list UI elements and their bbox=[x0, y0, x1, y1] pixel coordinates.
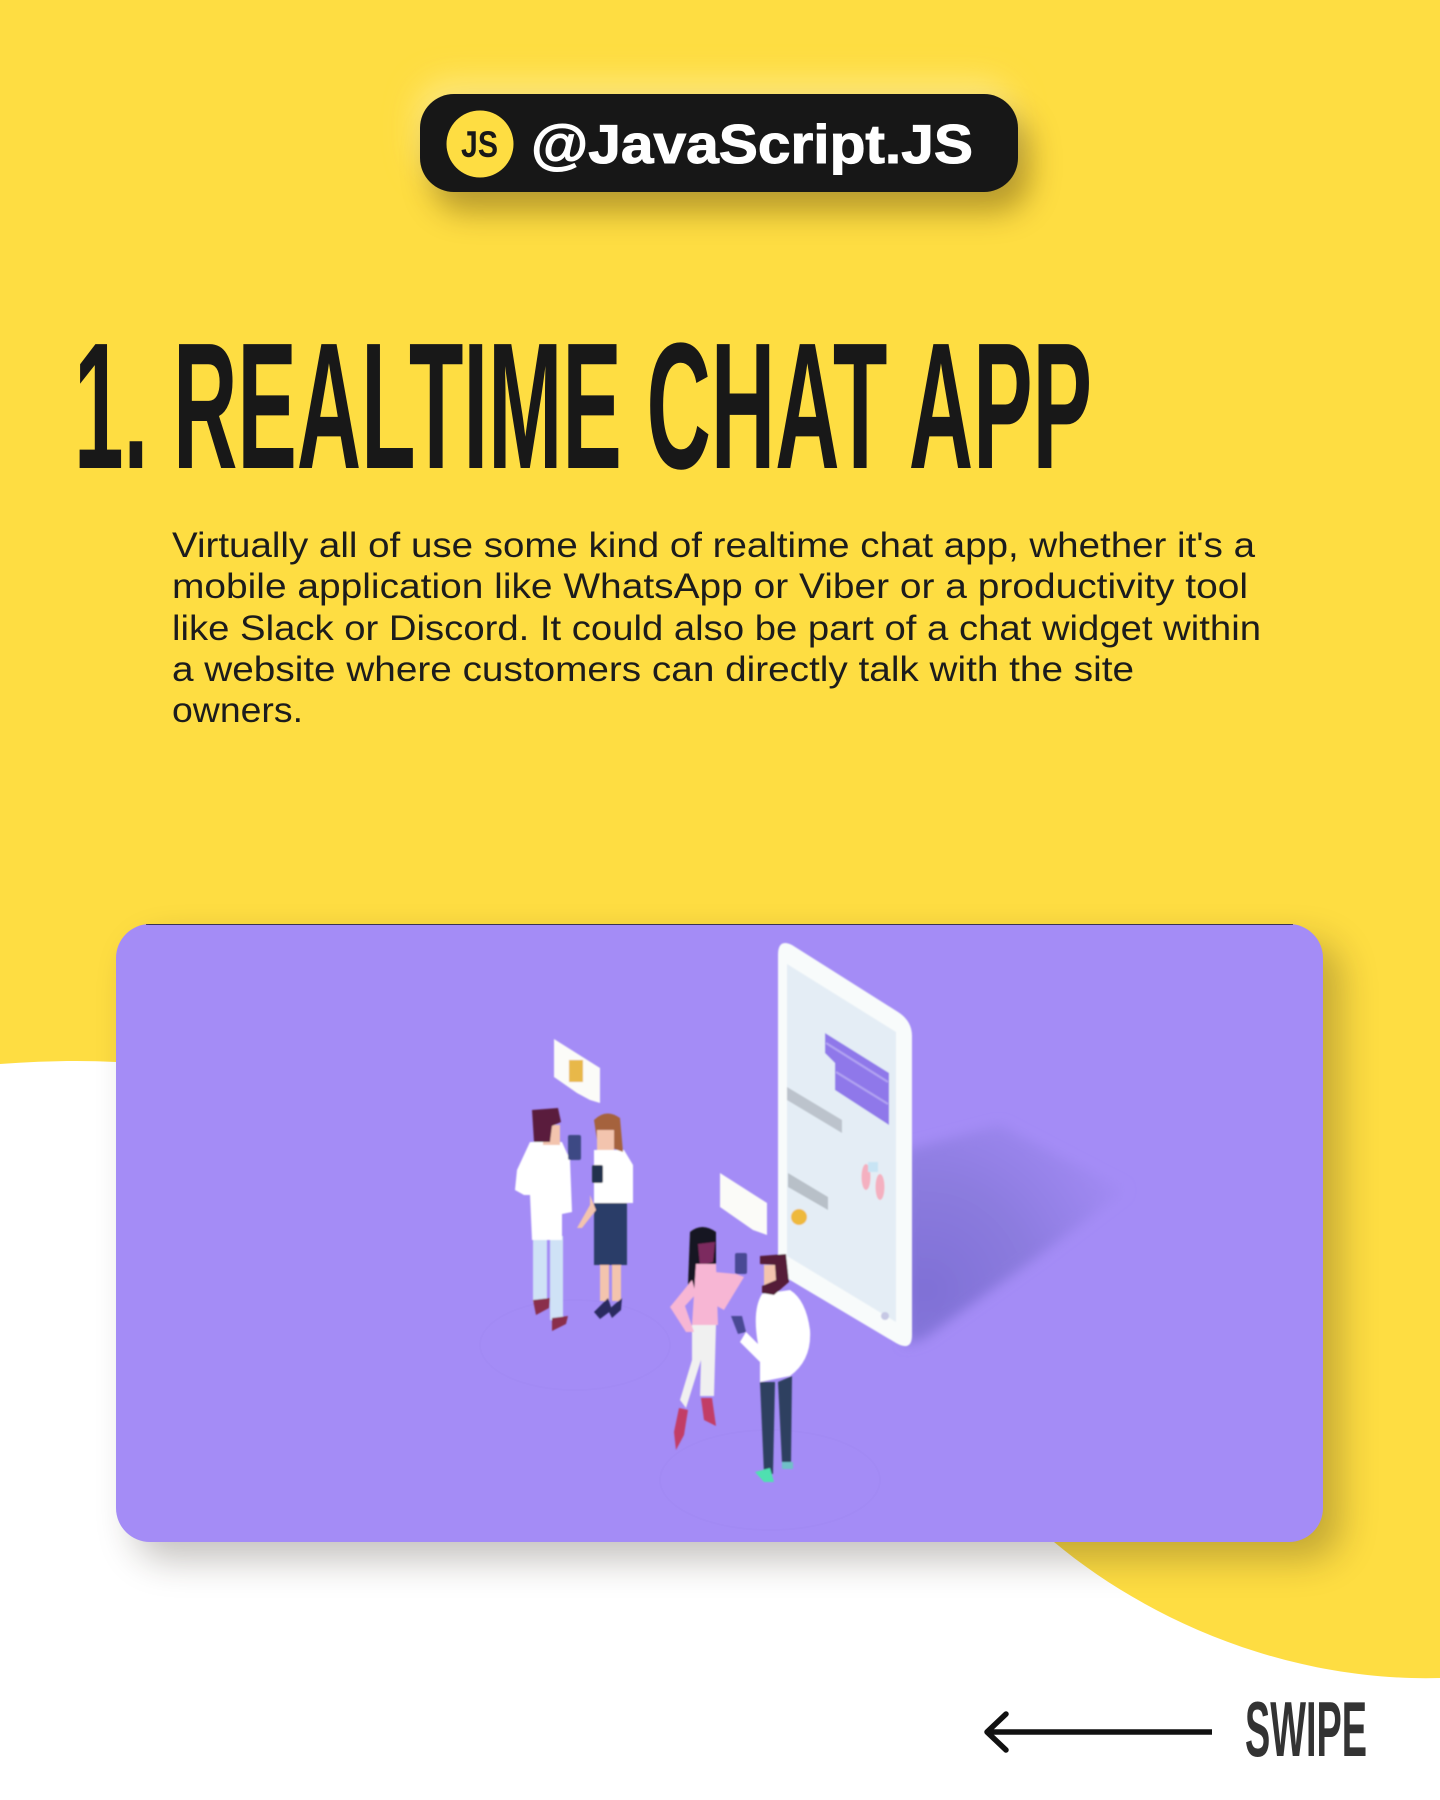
woman 1 bbox=[577, 1113, 633, 1319]
body paragraph: a website where customers can directly talk with the site bbox=[172, 650, 1134, 689]
arrow: swipe left bbox=[987, 1714, 1212, 1750]
man 1 bbox=[515, 1108, 581, 1331]
man 2 bbox=[731, 1254, 810, 1482]
body paragraph: like Slack or Discord. It could also be part of a chat widget within bbox=[172, 609, 1261, 648]
phone cast shadow bbox=[905, 1125, 1125, 1345]
JS logo circle bbox=[446, 110, 514, 178]
purple illustration card bbox=[116, 924, 1323, 1542]
illustration: chat app users bbox=[480, 943, 1125, 1530]
handle text: @JavaScript.JS bbox=[531, 113, 973, 175]
JS logo circle: JS bbox=[461, 124, 498, 165]
body paragraph bbox=[172, 526, 1261, 730]
woman 2 bbox=[670, 1227, 747, 1450]
speech bubble 2 bbox=[720, 1173, 767, 1235]
body paragraph: mobile application like WhatsApp or Viber or a productivity tool bbox=[172, 567, 1248, 606]
top edge line bbox=[146, 924, 1293, 925]
handle badge bbox=[420, 94, 1018, 192]
body paragraph: owners. bbox=[172, 691, 303, 730]
floor rings bbox=[480, 1300, 880, 1530]
body paragraph: Virtually all of use some kind of realtime chat app, whether it's a bbox=[172, 526, 1256, 565]
phone bbox=[778, 943, 912, 1346]
speech bubble 1 bbox=[554, 1039, 600, 1103]
